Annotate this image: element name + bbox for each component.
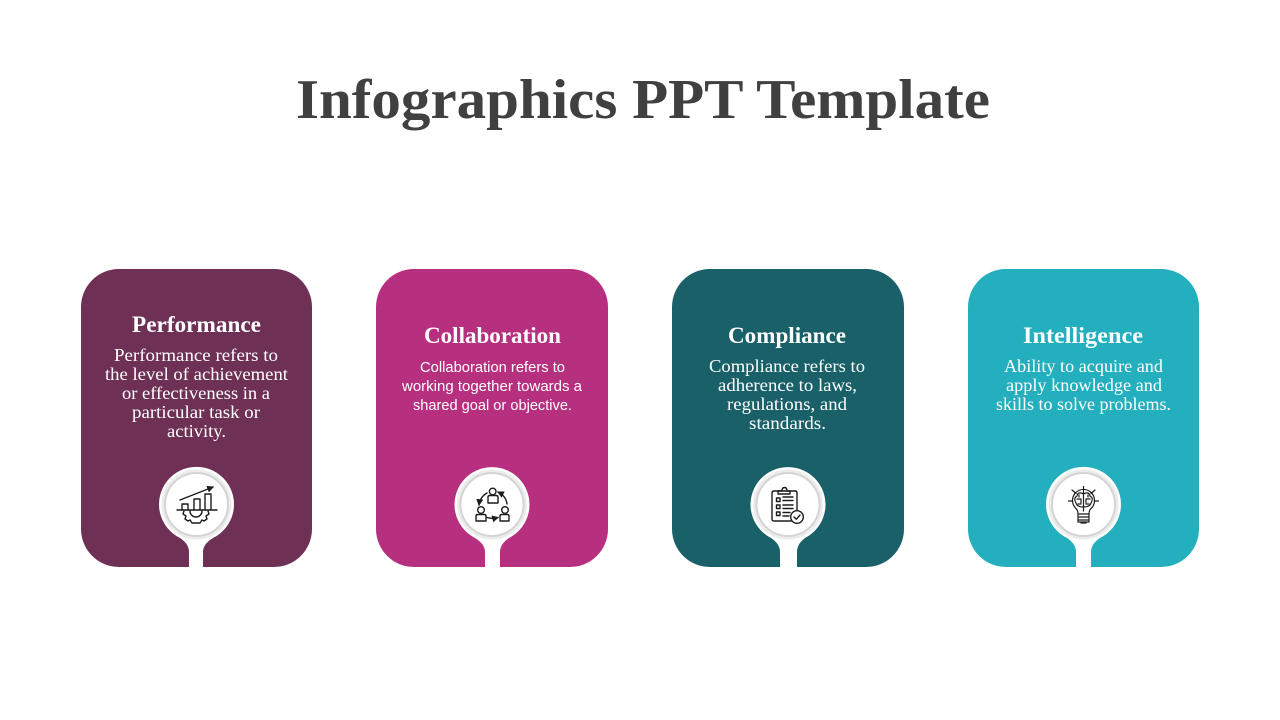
heading: collaboration: Collaboration [424, 323, 561, 348]
text block: performance description [105, 345, 288, 441]
text block: collaboration description: shared goal or objective. [413, 398, 572, 414]
text block: intelligence description: skills to solve problems. [996, 394, 1171, 414]
icon: bar chart with gear [177, 487, 217, 523]
card background [672, 269, 904, 567]
text block: compliance description: standards. [749, 413, 826, 433]
text block: performance description: the level of achievement [105, 364, 288, 384]
heading: compliance: Compliance [728, 323, 846, 348]
title: Infographics PPT Template [296, 69, 990, 131]
badge: white pin [1046, 467, 1121, 567]
panel: compliance [672, 269, 904, 567]
icon: clipboard checklist [772, 488, 803, 523]
text block: intelligence description: Ability to acquire and [1004, 356, 1163, 376]
text block: collaboration description [401, 360, 583, 414]
badge: white pin [751, 467, 826, 567]
icon: team cycle [476, 488, 509, 521]
text block: intelligence description: apply knowledge and [1006, 375, 1162, 395]
card background [376, 269, 608, 567]
text block: intelligence description [996, 356, 1171, 414]
text block: performance description: activity. [167, 421, 226, 441]
heading: performance: Performance [132, 312, 261, 337]
card background [968, 269, 1199, 567]
card background [81, 269, 312, 567]
text block: performance description: or effectiveness in a [122, 383, 270, 403]
heading: intelligence: Intelligence [1023, 323, 1143, 348]
text block: compliance description: regulations, and [727, 394, 847, 414]
text block: compliance description: adherence to laws, [718, 375, 857, 395]
text block: compliance description: Compliance refers to [709, 356, 865, 376]
panel: collaboration [376, 269, 608, 567]
text block: performance description: Performance refers to [114, 345, 278, 365]
text block: collaboration description: Collaboration refers to [420, 360, 565, 376]
panel: intelligence [968, 269, 1199, 567]
badge: white pin [159, 467, 234, 567]
text block: collaboration description: working together towards a [401, 379, 583, 395]
text block: compliance description [709, 356, 865, 433]
panel: performance [81, 269, 312, 567]
text block: performance description: particular task or [132, 402, 260, 422]
icon: light bulb with brain [1068, 486, 1098, 523]
badge: white pin [455, 467, 530, 567]
